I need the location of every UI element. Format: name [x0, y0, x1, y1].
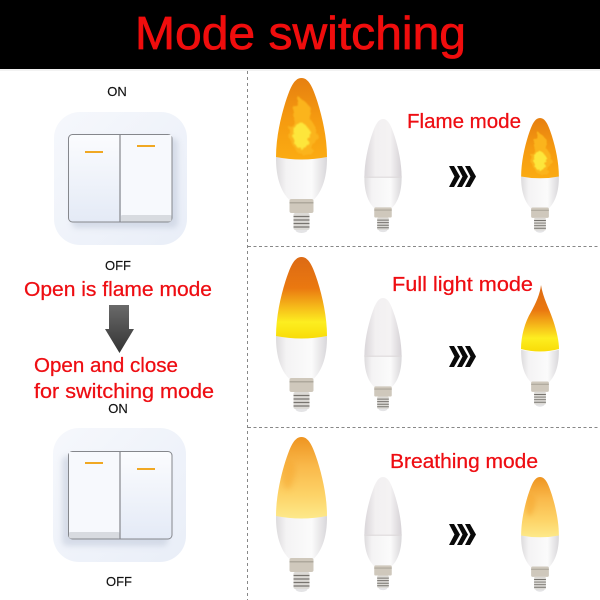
- bulb: unlit: [364, 298, 402, 411]
- icon: wall switch right rocker pressed: [54, 112, 187, 245]
- arrow: down: [105, 305, 134, 353]
- panel: breathing mode: [276, 437, 559, 592]
- heading: full light mode: Full light mode: [392, 274, 533, 296]
- panel: full light mode: [276, 257, 559, 412]
- bulb: large full light: [276, 257, 327, 412]
- bulb: unlit: [364, 119, 402, 232]
- arrow: chevrons: [449, 524, 476, 545]
- heading: breathing mode: Breathing mode: [390, 451, 538, 473]
- bulb: unlit: [364, 477, 402, 590]
- bulb: small breathing: [521, 477, 559, 592]
- callout: open and close: [34, 355, 214, 403]
- callout: open and close: for switching mode: [34, 381, 214, 403]
- bulb: large flame: [276, 78, 327, 233]
- panel: switch instructions: [24, 84, 214, 589]
- arrow: chevrons: [449, 346, 476, 367]
- label: ON top: ON: [107, 84, 127, 99]
- header band: [0, 0, 600, 69]
- label: OFF bottom: OFF: [106, 574, 132, 589]
- bulb: large breathing: [276, 437, 327, 592]
- heading: flame mode: Flame mode: [407, 111, 521, 133]
- panel: flame mode: [276, 78, 559, 233]
- bulb: small flame: [521, 118, 559, 233]
- label: ON bottom: ON: [108, 401, 128, 416]
- arrow: chevrons: [449, 166, 476, 187]
- label: OFF top: OFF: [105, 258, 131, 273]
- icon: wall switch left rocker pressed: [53, 428, 186, 562]
- title: Mode switching: [135, 7, 466, 59]
- callout: open and close: Open and close: [34, 355, 178, 377]
- callout: open is flame mode: Open is flame mode: [24, 279, 212, 301]
- bulb: small full light: [521, 285, 559, 407]
